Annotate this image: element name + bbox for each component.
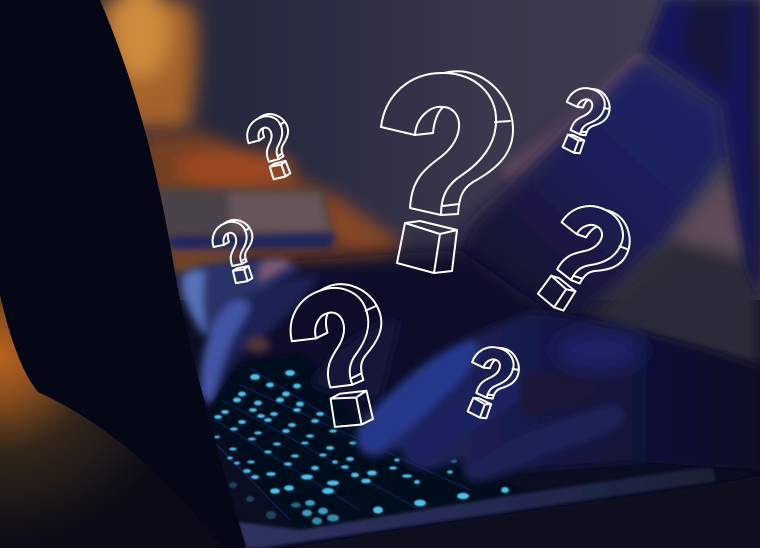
laptop front edge (238, 466, 760, 548)
medium question mark, lower centre (278, 273, 414, 437)
keyboard backlight keys (214, 370, 509, 525)
dark central hand mass (230, 250, 560, 430)
right hand with fingers (356, 312, 760, 482)
keyboard key row lines (212, 368, 470, 520)
medium question mark, right (528, 194, 640, 326)
large question mark (381, 71, 513, 273)
laptop lid, foreground (0, 0, 246, 548)
small question mark, left (206, 214, 270, 288)
left hand (180, 258, 320, 405)
small question mark, upper right (557, 84, 613, 158)
blurred desk (140, 132, 405, 272)
blurred background keyboard (155, 188, 335, 272)
small question mark, upper left (240, 108, 308, 184)
lower finger behind question mark (310, 320, 400, 400)
sleeve (645, 0, 760, 300)
blue sheen on back of right hand (555, 330, 645, 370)
small question mark, lower right (461, 343, 523, 424)
pink highlight band along arm (500, 52, 650, 180)
forearm (440, 58, 728, 320)
wooden table, foreground left (0, 295, 222, 548)
orange lamp glow (95, 0, 198, 130)
grey surface and triangle at right (585, 160, 760, 370)
laptop keyboard deck (205, 352, 530, 532)
